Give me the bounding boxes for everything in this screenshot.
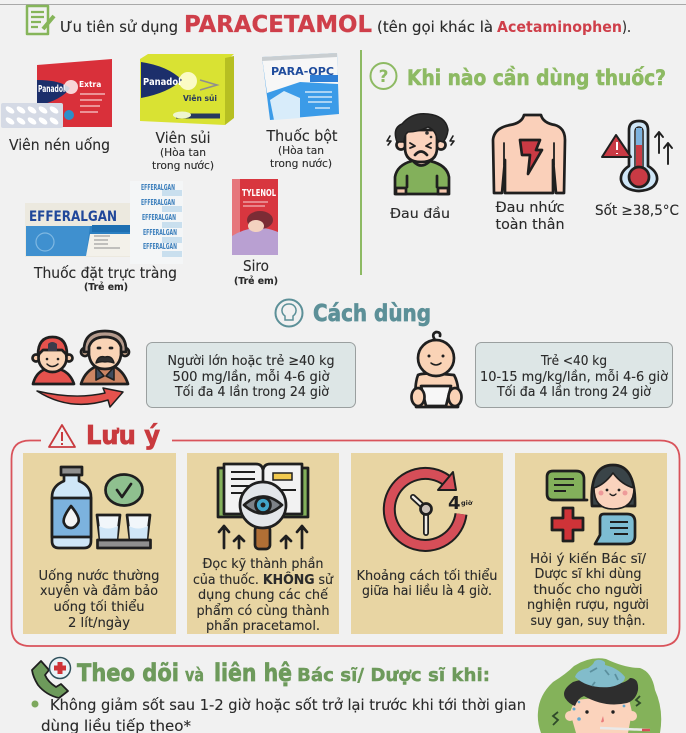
card: read ingredients: phẩm có cùng thành — [196, 602, 330, 619]
card: dose interval: giữa hai liều là 4 giờ. — [362, 582, 492, 599]
product: Panadol Extra tablets — [1, 59, 112, 128]
panel: adult dose — [146, 342, 356, 408]
label: Sốt ≥38,5°C: Sốt ≥38,5°C — [595, 202, 679, 219]
label: Thuốc bột: trong nước) — [270, 157, 332, 170]
title: PARACETAMOL — [184, 10, 372, 38]
label: Thuốc bột: Thuốc bột — [266, 127, 338, 145]
illustration: sick man with ice pack — [538, 658, 661, 733]
title — [60, 10, 631, 38]
icon: headache person — [387, 114, 454, 194]
title: ). — [622, 18, 631, 36]
panel: adult dose: Người lớn hoặc trẻ ≥40 kg — [168, 353, 334, 369]
icon: baby — [412, 332, 462, 407]
label: Viên sủi — [152, 129, 214, 172]
product: Efferalgan suppositories: EFFERALGAN — [29, 209, 117, 225]
divider — [360, 50, 362, 275]
label: Siro — [234, 257, 278, 287]
card: read ingredients: dụng chung các chế — [198, 586, 329, 603]
card: drink water — [23, 453, 176, 634]
card: read ingredients: của thuốc. KHÔNG sử — [193, 572, 334, 588]
product: Para-OPC powder: PARA-OPC — [271, 65, 334, 78]
panel: Lưu ý frame — [12, 440, 680, 646]
label: Viên sủi: (Hòa tan — [160, 146, 206, 159]
title: Acetaminophen — [497, 18, 622, 36]
product: Panadol Extra tablets: Extra — [79, 80, 101, 89]
heading: Theo dõi — [77, 659, 490, 687]
label: Thuốc đặt trực tràng: Thuốc đặt trực tràng — [33, 264, 177, 282]
label: Viên sủi: trong nước) — [152, 159, 214, 172]
label: Đau nhức toàn thân: Đau nhức — [496, 200, 564, 216]
card: read ingredients: phẩn pracetamol. — [206, 617, 320, 634]
panel: child dose — [476, 342, 672, 408]
card: ask doctor: Dược sĩ khi dùng — [534, 566, 642, 582]
label: Đau nhức toàn thân: toàn thân — [496, 217, 564, 233]
label: Thuốc bột: (Hòa tan — [278, 144, 324, 157]
icon: phone with medical bubble — [32, 658, 70, 698]
product: Para-OPC powder — [262, 53, 339, 120]
product: Panadol effervescent — [140, 54, 234, 125]
heading: Theo dõi: Theo dõi — [77, 659, 179, 687]
label: Siro: Siro — [243, 257, 269, 275]
panel: child dose: 10-15 mg/kg/lần, mỗi 4-6 giờ — [480, 368, 669, 385]
icon: consultation — [547, 465, 635, 544]
heading: Cách dùng: Cách dùng — [313, 301, 431, 327]
card: dose interval: Khoảng cách tối thiểu — [356, 567, 498, 584]
product: Efferalgan suppositories: EFFERALGAN — [141, 183, 175, 192]
product: Tylenol syrup — [232, 179, 278, 255]
card: ask doctor: nghiện rượu, người — [527, 597, 649, 613]
card: drink water: 2 lít/ngày — [68, 615, 130, 631]
card: ask doctor — [515, 453, 667, 634]
heading: Theo dõi: liên hệ — [214, 659, 292, 687]
product: Efferalgan suppositories: EFFERALGAN — [141, 198, 175, 207]
card: ask doctor: Hỏi ý kiến Bác sĩ/ — [530, 550, 646, 567]
product: Efferalgan suppositories — [25, 181, 183, 264]
heading: Khi nào cần dùng thuốc: ? — [379, 67, 388, 87]
card: read ingredients: Đọc kỹ thành phần — [202, 556, 324, 572]
label: Đau nhức toàn thân — [496, 200, 564, 233]
heading: Theo dõi: và — [185, 665, 204, 686]
label: Thuốc bột — [266, 127, 338, 170]
panel: child dose: Trẻ <40 kg — [540, 353, 607, 369]
heading: Lưu ý — [49, 421, 160, 451]
label: Đau đầu: Đau đầu — [390, 206, 450, 222]
label: Thuốc đặt trực tràng — [33, 264, 177, 293]
icon: document with pen — [27, 6, 54, 34]
card: drink water: xuyên và đảm bảo — [40, 583, 158, 599]
card: ask doctor: suy gan, suy thận. — [530, 613, 646, 629]
icon: book with magnifier — [218, 464, 308, 549]
icon: thermometer with warning — [602, 121, 672, 191]
panel: adult dose: 500 mg/lần, mỗi 4-6 giờ — [172, 368, 330, 385]
card: ask doctor: thuốc cho người — [534, 581, 642, 598]
bullet text — [32, 696, 526, 733]
panel: adult dose: Tối đa 4 lần trong 24 giờ — [174, 383, 330, 400]
icon: body pain — [493, 115, 565, 193]
heading: Theo dõi: Bác sĩ/ Dược sĩ khi: — [297, 665, 490, 686]
card: drink water: uống tối thiểu — [54, 598, 144, 615]
icon: clock arrow — [389, 472, 476, 545]
label: Viên nén uống: Viên nén uống — [9, 136, 110, 154]
product: Panadol effervescent: Panadol — [143, 77, 181, 88]
icon: adult and teen with arrow — [32, 331, 129, 407]
product: Efferalgan suppositories: EFFERALGAN — [143, 228, 177, 237]
icon: water bottle and glasses — [52, 467, 150, 548]
card: dose interval — [351, 453, 503, 634]
product: Panadol Extra tablets: Panadol — [38, 84, 65, 95]
heading: Lưu ý: Lưu ý — [86, 421, 160, 451]
panel: child dose: Tối đa 4 lần trong 24 giờ — [496, 383, 652, 400]
card: read ingredients — [187, 453, 339, 634]
title: Ưu tiên sử dụng — [60, 18, 178, 36]
product: Panadol effervescent: Viên sủi — [183, 93, 217, 103]
product: Efferalgan suppositories: EFFERALGAN — [143, 242, 177, 251]
product: Tylenol syrup: TYLENOL — [242, 188, 276, 199]
label: Thuốc đặt trực tràng: (Trẻ em) — [84, 281, 128, 293]
label: Siro: (Trẻ em) — [234, 275, 278, 287]
bullet text: Không giảm sốt sau 1-2 giờ hoặc sốt trở lại trước khi tới thời gian — [50, 696, 526, 714]
product: Efferalgan suppositories: EFFERALGAN — [142, 213, 176, 222]
label: Viên sủi: Viên sủi — [156, 129, 210, 147]
title: (tên gọi khác là — [377, 18, 493, 36]
icon: clock arrow: giờ — [461, 499, 473, 507]
card: drink water: Uống nước thường — [38, 567, 160, 584]
icon: clock arrow: 4 — [448, 493, 461, 514]
heading: Cách dùng — [276, 300, 431, 327]
